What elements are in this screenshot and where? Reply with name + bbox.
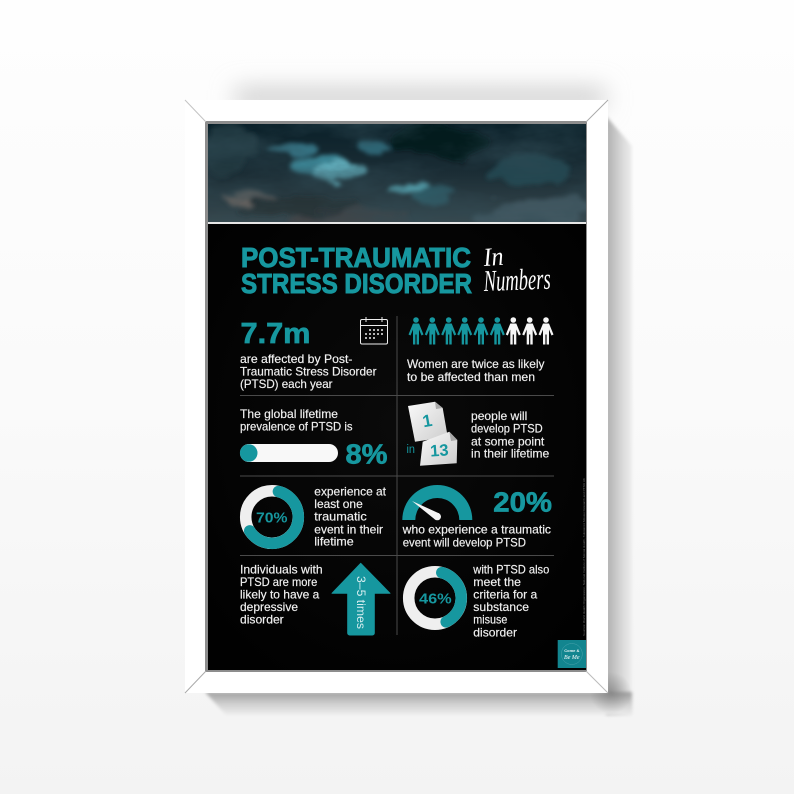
- text: substance misuse: criteria for a: [473, 588, 538, 602]
- frame shadow: bottom: [205, 692, 632, 715]
- donut chart: 70%: 70%: [256, 510, 288, 527]
- panel: 1 in 13: [406, 402, 550, 466]
- framed poster mockup: [184, 80, 634, 718]
- text: prevalence description: prevalence of PTSD is: [240, 420, 352, 434]
- donut chart: 70%: [246, 491, 298, 543]
- title: STRESS DISORDER: [241, 268, 472, 299]
- text: affected description: (PTSD) each year: [240, 377, 333, 391]
- text: women twice as likely: [407, 357, 544, 384]
- text: traumatic event: least one: [314, 497, 363, 511]
- text: people will develop PTSD: [471, 409, 550, 461]
- text: people will develop PTSD: people will: [471, 409, 527, 423]
- text: traumatic event: [314, 485, 387, 549]
- text: depressive disorder: likely to have a: [240, 588, 320, 602]
- text: depressive disorder: depressive: [240, 600, 298, 614]
- icon: paper with 13: 13: [430, 441, 449, 461]
- title: [241, 242, 472, 299]
- panel: 70% traumatic event: [246, 485, 387, 549]
- label: in: in: [406, 444, 415, 456]
- text: substance misuse: disorder: [473, 625, 517, 639]
- text: women twice as likely: Women are twice as likely: [407, 357, 544, 371]
- text: traumatic event: lifetime: [314, 535, 354, 549]
- panel: global prevalence 8%: [240, 407, 388, 470]
- text: prevalence description: [240, 407, 352, 434]
- logo badge: Be Me: [564, 655, 580, 661]
- text: women twice as likely: to be affected than men: [407, 370, 535, 384]
- gauge chart: [402, 485, 472, 520]
- subtitle: In Numbers: In: [481, 242, 504, 272]
- text: prevalence description: The global lifetime: [240, 407, 338, 421]
- stat: 8%: 8%: [346, 438, 388, 470]
- text: people will develop PTSD: in their lifetime: [471, 447, 550, 461]
- icon: row of nine people: [408, 317, 554, 344]
- text: develop PTSD: [402, 523, 551, 549]
- panel: women vs men: [407, 317, 554, 384]
- progress bar: [240, 444, 338, 462]
- text: substance misuse: with PTSD also: [472, 562, 550, 576]
- panel: 7.7m affected: [240, 317, 388, 391]
- logo badge: [558, 640, 586, 668]
- text: people will develop PTSD: at some point: [471, 434, 545, 448]
- frame: [185, 100, 608, 693]
- arrow: 3-5 times: [332, 563, 390, 635]
- panel: 20% develop PTSD: [402, 485, 552, 549]
- panel: substance misuse: [409, 562, 550, 639]
- text: develop PTSD: who experience a traumatic: [402, 523, 551, 537]
- text: depressive disorder: Individuals with: [240, 562, 323, 576]
- grid dividers: [240, 316, 554, 635]
- donut chart: 46%: [409, 572, 461, 624]
- text: traumatic event: traumatic: [314, 510, 367, 524]
- stat: 7.7m: 7.7m: [240, 318, 310, 350]
- white band under photo: [208, 222, 586, 224]
- icon: paper with 13: [420, 432, 457, 466]
- text: substance misuse: meet the: [473, 575, 521, 589]
- text: depressive disorder: disorder: [240, 613, 284, 627]
- subtitle: In Numbers: Numbers: [482, 263, 551, 298]
- soft top shadow: [235, 88, 605, 108]
- text: affected description: [240, 352, 377, 391]
- donut chart: 46%: 46%: [419, 591, 452, 608]
- icon: paper with 1: [408, 402, 448, 442]
- text: substance misuse: substance: [473, 600, 529, 614]
- stat: 20%: 20%: [493, 487, 552, 518]
- text: depressive disorder: PTSD are more: [240, 575, 318, 589]
- black panel: [208, 224, 586, 670]
- text: substance misuse: misuse: [473, 613, 508, 627]
- text: affected description: are affected by Post-: [240, 352, 352, 366]
- frame shadow: right: [606, 116, 632, 715]
- title: POST-TRAUMATIC: [241, 242, 471, 273]
- storm cloud photo: [208, 124, 586, 222]
- icon: calendar: [360, 317, 388, 344]
- arrow: 3-5 times: 3–5 times: [354, 576, 368, 629]
- vertical credit microtext: Sources: World Health Organization, National Institute of Mental Health, Substance Misuse Research and PTSD UK: [582, 478, 586, 636]
- text: depressive disorder: [240, 562, 323, 627]
- text: substance misuse: [472, 562, 550, 639]
- text: traumatic event: event in their: [314, 522, 383, 536]
- frame shadow: corner: [590, 672, 632, 714]
- logo badge: Come &: [564, 648, 579, 653]
- text: people will develop PTSD: develop PTSD: [471, 422, 543, 436]
- text: traumatic event: experience at: [314, 485, 387, 499]
- icon: paper with 1: 1: [421, 411, 434, 431]
- text: affected description: Traumatic Stress Disorder: [240, 364, 377, 378]
- panel: depressive disorder: [240, 562, 390, 635]
- subtitle: In Numbers: [481, 242, 551, 298]
- text: develop PTSD: event will develop PTSD: [403, 535, 526, 549]
